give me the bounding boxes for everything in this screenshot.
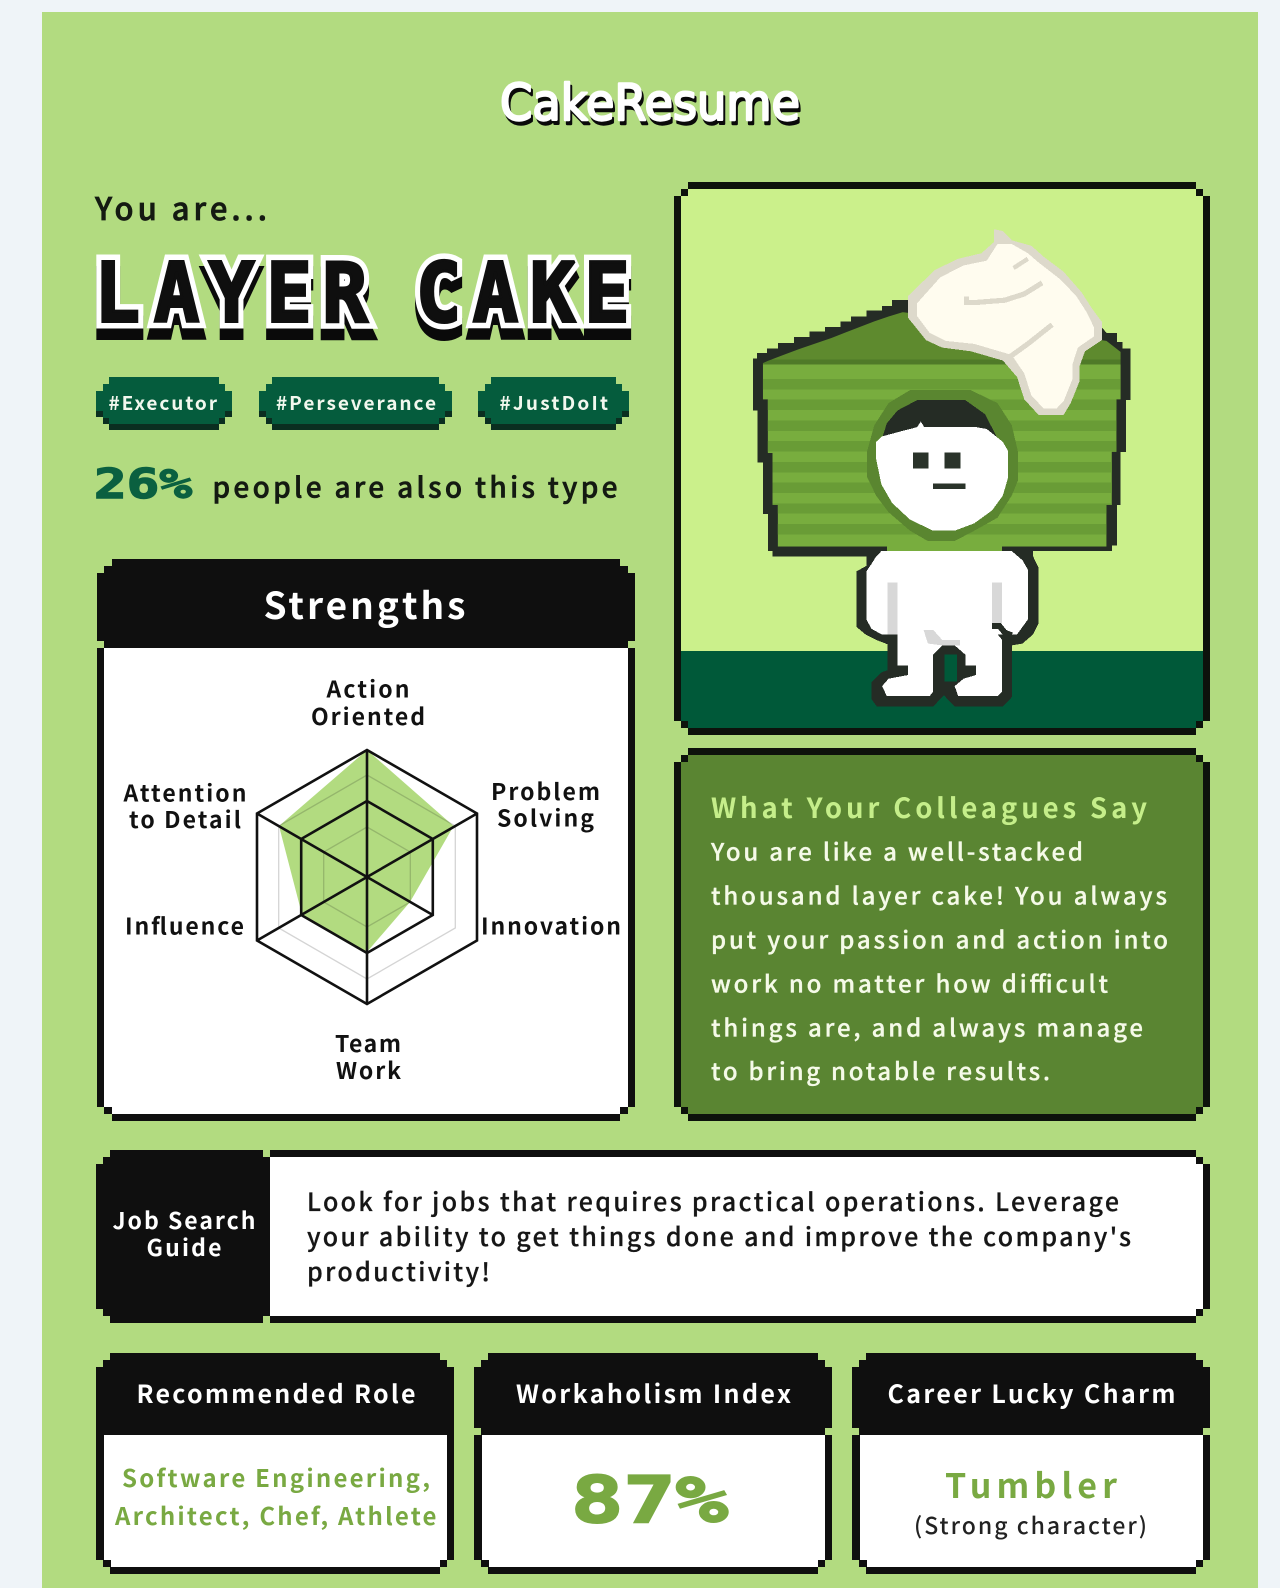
panel: What Your Colleagues Say: [674, 748, 1210, 1121]
guide text: productivity!: [307, 1253, 490, 1289]
logo: CakeResume: CakeResume: [500, 74, 800, 132]
cake top: [772, 312, 1121, 360]
card: Workaholism Index: [474, 1353, 832, 1574]
title: LAYER CAKE: LAYER CAKE: [94, 257, 630, 353]
stat: 26%: 26%: [94, 460, 192, 508]
card: Recommended Role: [96, 1353, 454, 1574]
body text: thousand layer cake! You always: [711, 876, 1167, 912]
card value: Software Engineering,: [122, 1459, 430, 1494]
hole rim: [867, 390, 1018, 541]
card heading: Recommended Role: [136, 1375, 416, 1411]
panel: Strengths: [97, 559, 635, 1121]
label: Innovation: Innovation: [481, 908, 621, 942]
body text: put your passion and action into: [711, 920, 1168, 956]
tag: #JustDoIt: #JustDoIt: [500, 389, 608, 416]
tag: #Executor: [96, 377, 232, 430]
hair: [882, 400, 997, 438]
eyes: [913, 452, 929, 469]
title: LAYER CAKE: LAYER CAKE: [94, 246, 630, 341]
whipped cream: [908, 229, 1102, 415]
label: Action Oriented: Action: [326, 670, 410, 704]
label: Team Work: Work: [336, 1052, 401, 1086]
guide text: [307, 1183, 1131, 1289]
body text: things are, and always manage: [711, 1008, 1143, 1044]
label: Action Oriented: Oriented: [311, 698, 425, 732]
cake stripes: [753, 365, 1131, 553]
card note: (Strong character): [914, 1507, 1147, 1541]
text: You are...: You are...: [94, 184, 267, 229]
body outline: [856, 551, 1039, 706]
tag: #JustDoIt: [478, 377, 629, 430]
guide text: Look for jobs that requires practical operations. Leverage: [307, 1183, 1119, 1219]
heading: Strengths: Strengths: [264, 576, 466, 630]
logo: CakeResume: CakeResume: [502, 78, 802, 136]
radar chart: [257, 750, 477, 1004]
text: people are also this type: people are also this type: [212, 466, 618, 506]
body text: You are like a well-stacked: [710, 832, 1083, 868]
gap between legs: [945, 655, 957, 681]
guide text: your ability to get things done and improve the company's: [307, 1218, 1131, 1254]
title: LAYER CAKE: LAYER CAKE: [94, 246, 630, 341]
card heading: Career Lucky Charm: [888, 1375, 1176, 1411]
icon: layer cake character: [753, 229, 1131, 706]
heading: Job Search Guide: Guide: [146, 1229, 222, 1263]
card: Career Lucky Charm: [852, 1353, 1210, 1574]
body text: [710, 832, 1168, 1087]
heading: Job Search Guide: [112, 1202, 256, 1263]
label: Action Oriented: [311, 670, 425, 732]
stat: 87%: 87%: [571, 1464, 729, 1538]
card value: Tumbler: Tumbler: [945, 1459, 1117, 1508]
card value: Architect, Chef, Athlete: [114, 1497, 436, 1532]
card heading: Workaholism Index: [516, 1375, 791, 1411]
label: Team Work: [335, 1025, 401, 1086]
heading: Job Search Guide: Job Search: [112, 1202, 256, 1236]
mouth: [933, 484, 965, 489]
label: Problem Solving: [491, 773, 600, 834]
label: Team Work: Team: [335, 1025, 401, 1059]
body shading: [887, 583, 897, 634]
label: Attention to Detail: [122, 774, 246, 835]
body text: work no matter how difficult: [711, 964, 1108, 1000]
panel: Job Search Guide: [96, 1150, 1210, 1323]
cake outline: [753, 300, 1131, 557]
label: Problem Solving: Problem: [491, 773, 600, 807]
tag: #Perseverance: #Perseverance: [276, 389, 436, 416]
body: [866, 551, 1028, 696]
face: [876, 422, 1008, 531]
card value: [114, 1459, 436, 1532]
tag: #Perseverance: [259, 377, 452, 430]
label: Influence: Influence: [125, 908, 244, 942]
label: Problem Solving: Solving: [497, 800, 594, 834]
body text: to bring notable results.: [711, 1052, 1050, 1087]
tag: #Executor: #Executor: [108, 389, 218, 416]
panel: character illustration: [674, 182, 1210, 735]
label: Attention to Detail: Attention: [122, 774, 246, 808]
label: Attention to Detail: to Detail: [129, 801, 241, 835]
heading: What Your Colleagues Say: [711, 786, 1147, 826]
